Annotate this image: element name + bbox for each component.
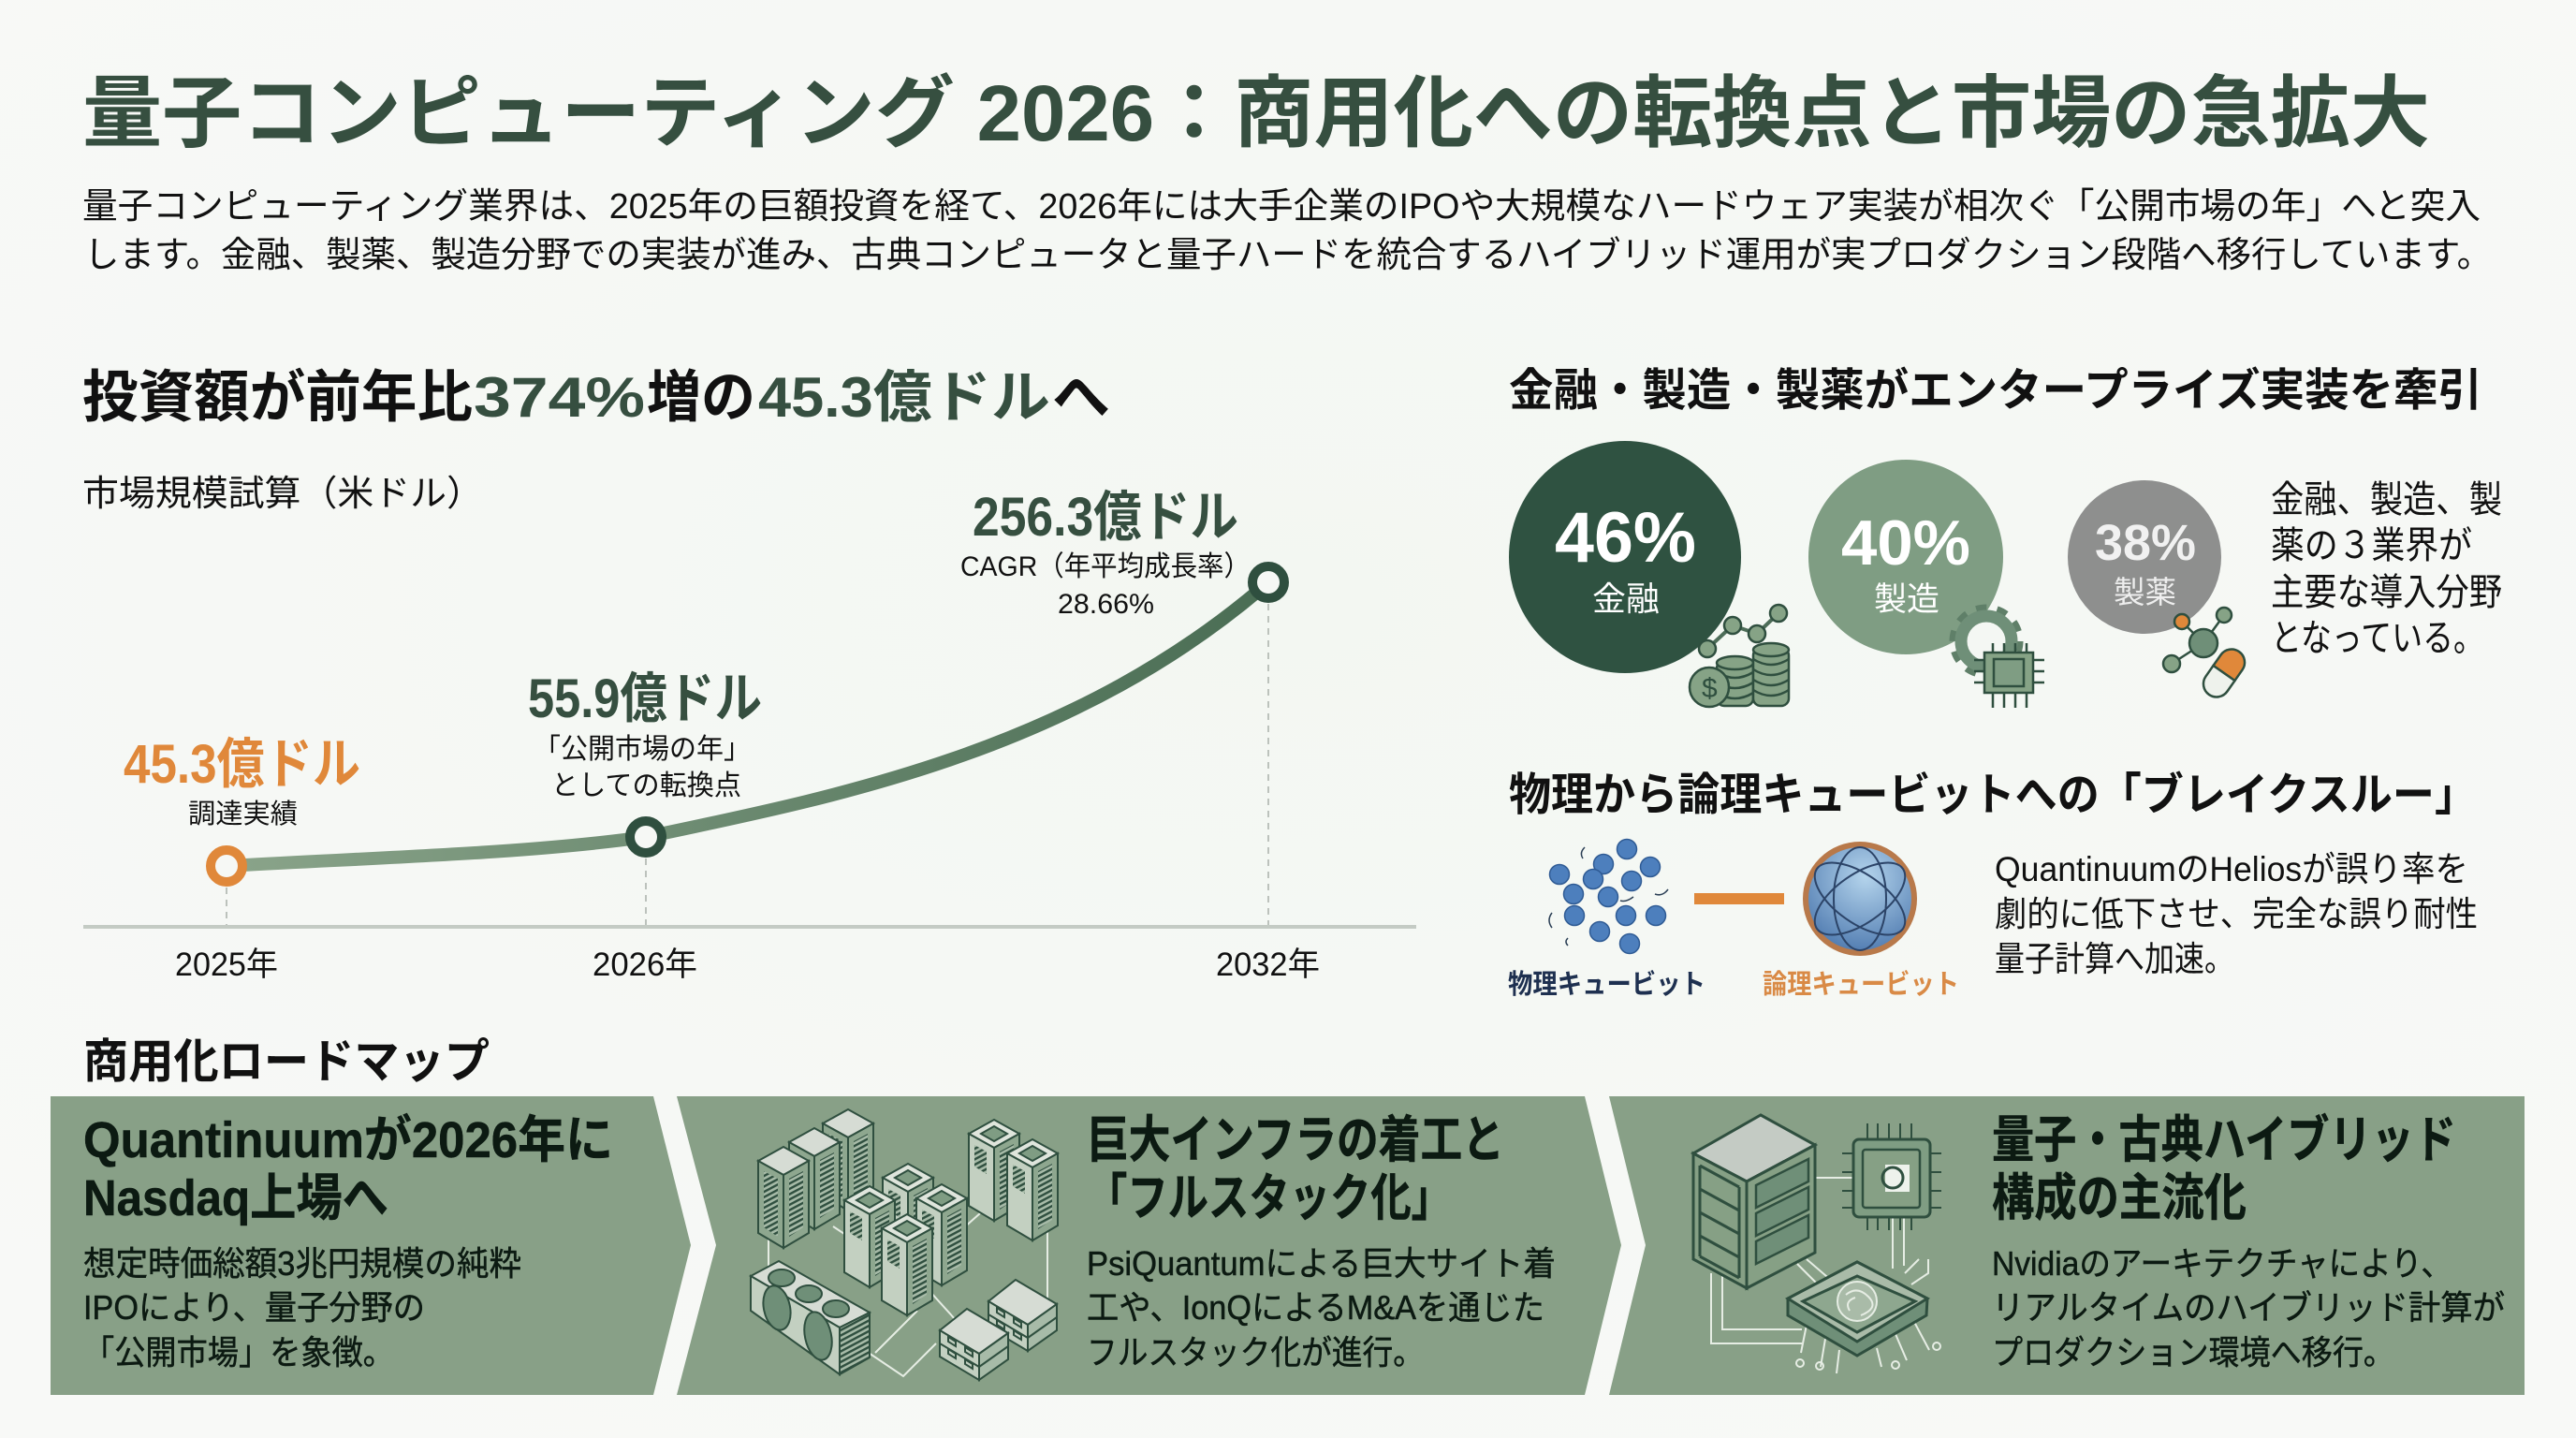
icon: manufacturing gear and chip (1954, 609, 2044, 708)
step 3: hybrid architecture: 量子・古典ハイブリッド (1992, 1112, 2456, 1168)
heading: investment: へ (1052, 366, 1110, 429)
intro text (82, 187, 2492, 275)
panel: logical qubit breakthrough (1508, 770, 2478, 1000)
step 2: giant infrastructure: 巨大インフラの着工と (1087, 1112, 1504, 1168)
side note: three sectors: となっている。 (2271, 618, 2484, 659)
step 2: giant infrastructure (677, 1096, 1621, 1395)
text: Helios note: 劇的に低下させ、完全な誤り耐性 (1995, 895, 2478, 933)
title: 量子コンピューティング 2026：商用化への転換点と市場の急拡大 (82, 69, 2430, 157)
step 2: giant infrastructure: 工や、IonQによるM&Aを通じた (1087, 1288, 1544, 1327)
step 2: giant infrastructure: 「フルスタック化」 (1087, 1170, 1452, 1226)
bubble: finance 46%: 金融 (1592, 580, 1660, 618)
bubble: pharma 38% (2068, 480, 2221, 634)
heading: roadmap: 商用化ロードマップ (83, 1035, 490, 1088)
data label 2026: 「公開市場の年」 (534, 734, 751, 765)
axis labels: 2025年 (175, 946, 278, 983)
heading: breakthrough: 物理から論理キュービットへの「ブレイクスルー」 (1509, 770, 2477, 820)
step 2: giant infrastructure: PsiQuantumによる巨大サイト着 (1087, 1244, 1556, 1283)
heading: enterprise: 金融・製造・製薬がエンタープライズ実装を牽引 (1509, 366, 2482, 416)
bubble: pharma 38%: 38% (2095, 515, 2196, 571)
bubble: manufacturing 40%: 製造 (1874, 581, 1939, 618)
step 1: Quantinuum IPO: IPOにより、量子分野の (83, 1288, 425, 1327)
step 3: hybrid architecture (1609, 1096, 2525, 1395)
intro text: 量子コンピューティング業界は、2025年の巨額投資を経て、2026年には大手企業のIPOや大規模なハードウェア実装が相次ぐ「公開市場の年」へと突入 (82, 187, 2481, 227)
bubble: manufacturing 40% (1808, 460, 2003, 654)
side note: three sectors: 主要な導入分野 (2271, 572, 2502, 613)
icon: logical qubit globe (1803, 844, 1917, 953)
heading: investment: 増の (647, 366, 755, 429)
text: Helios note: 量子計算へ加速。 (1995, 940, 2234, 978)
panel: roadmap strip (51, 1096, 2525, 1395)
intro text: します。金融、製薬、製造分野での実装が進み、古典コンピュータと量子ハードを統合するハイブリッド運用が実プロダクション段階へ移行しています。 (84, 236, 2492, 275)
panel: enterprise adoption (1509, 366, 2502, 708)
step 2: giant infrastructure: フルスタック化が進行。 (1087, 1333, 1424, 1372)
bubble: pharma 38%: 製薬 (2114, 575, 2176, 609)
heading: investment: 374% (474, 366, 645, 429)
icon: physical qubits (1549, 839, 1668, 953)
step 3: hybrid architecture: リアルタイムのハイブリッド計算が (1992, 1288, 2505, 1327)
label: physical qubit: 物理キュービット (1508, 969, 1705, 1000)
chart subtitle: 市場規模試算（米ドル） (82, 475, 483, 514)
label: logical qubit: 論理キュービット (1763, 969, 1959, 1000)
data label 2032 (960, 487, 1251, 620)
text: Helios note: QuantinuumのHeliosが誤り率を (1995, 850, 2468, 888)
icon: finance coins and chart: $ (1702, 673, 1718, 704)
heading: investment (82, 366, 1110, 429)
heading: investment: 45.3億ドル (758, 366, 1050, 429)
data label 2026: としての転換点 (551, 770, 741, 801)
step 1: Quantinuum IPO: 想定時価総額3兆円規模の純粋 (83, 1244, 521, 1283)
line chart (83, 566, 1416, 929)
axis labels: 2032年 (1216, 946, 1320, 983)
icon: finance coins and chart (1690, 605, 1789, 707)
step 3: hybrid architecture: プロダクション環境へ移行。 (1992, 1333, 2394, 1372)
step 3: hybrid architecture: Nvidiaのアーキテクチャにより、 (1992, 1244, 2452, 1283)
axis labels (175, 946, 1320, 983)
data label 2032: 256.3億ドル (973, 487, 1238, 548)
bubble: finance 46% (1509, 441, 1741, 673)
side note: three sectors (2271, 479, 2502, 659)
icon: server, GPU chip and quantum chip (1693, 1115, 1941, 1373)
axis labels: 2026年 (593, 946, 697, 983)
text: Helios note (1995, 850, 2478, 978)
data label 2032: CAGR（年平均成長率） (960, 551, 1251, 582)
step 3: hybrid architecture: 構成の主流化 (1992, 1170, 2247, 1226)
step 1: Quantinuum IPO: Nasdaq上場へ (83, 1170, 388, 1226)
data label 2025: 45.3億ドル (124, 734, 360, 795)
step 1: Quantinuum IPO: Quantinuumが2026年に (83, 1112, 613, 1168)
side note: three sectors: 薬の３業界が (2271, 525, 2472, 566)
data label 2025: 調達実績 (188, 799, 298, 829)
bubble: manufacturing 40%: 40% (1841, 507, 1970, 579)
heading: investment: 投資額が前年比 (82, 366, 473, 429)
data label 2025 (124, 734, 360, 829)
data label 2026: 55.9億ドル (528, 668, 762, 729)
data label 2032: 28.66% (1058, 589, 1154, 620)
side note: three sectors: 金融、製造、製 (2271, 479, 2502, 521)
panel: market growth chart (82, 366, 1416, 983)
data label 2026 (528, 668, 762, 801)
arrow: physical to logical (1694, 893, 1784, 904)
step 1: Quantinuum IPO (51, 1096, 691, 1395)
icon: pharma molecule and pill (2163, 608, 2250, 702)
bubble: finance 46%: 46% (1555, 498, 1696, 578)
step 1: Quantinuum IPO: 「公開市場」を象徴。 (83, 1333, 394, 1372)
icon: isometric data center (751, 1109, 1058, 1380)
